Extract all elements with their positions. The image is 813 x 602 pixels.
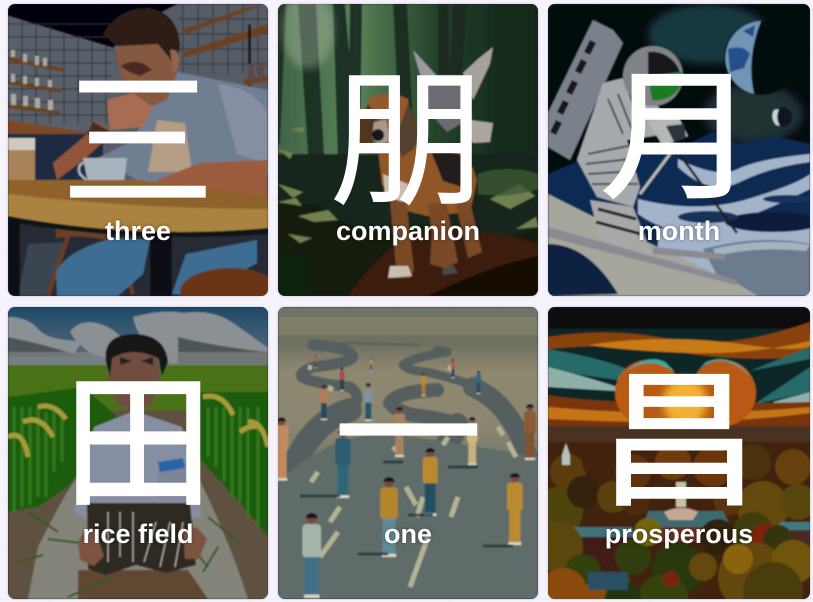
man xyxy=(74,411,202,521)
illustration: man at cafe table xyxy=(8,4,268,296)
ski pole xyxy=(667,137,737,233)
card: rice field xyxy=(8,307,268,599)
english label: companion xyxy=(336,216,480,246)
illustration: astronaut skiing on the moon xyxy=(548,4,810,296)
english label: one xyxy=(384,519,432,549)
tool case xyxy=(87,503,196,575)
helmet xyxy=(623,46,683,106)
english label: prosperous xyxy=(605,519,753,549)
kanji: 昌 xyxy=(598,323,760,536)
card: prosperous xyxy=(548,307,810,599)
illustration: dog and dove in forest xyxy=(278,4,538,296)
card: month xyxy=(548,4,810,296)
kanji: 朋 xyxy=(329,20,487,237)
man hair and face xyxy=(98,69,268,189)
kanji: 月 xyxy=(599,22,758,229)
backpack xyxy=(548,20,623,160)
planet xyxy=(724,21,798,95)
kanji: 一 xyxy=(333,315,483,532)
dove xyxy=(413,50,437,86)
cup xyxy=(83,158,127,183)
english label: three xyxy=(105,216,171,246)
trees xyxy=(548,442,810,599)
card: one xyxy=(278,307,538,599)
people xyxy=(314,355,317,368)
roads xyxy=(287,343,533,482)
twin suns xyxy=(615,360,681,426)
table xyxy=(8,180,268,232)
jeans xyxy=(56,238,257,296)
card: three xyxy=(8,4,268,296)
college buildings xyxy=(648,505,718,542)
english label: month xyxy=(638,216,720,246)
dog xyxy=(378,144,477,216)
illustration: people on branching roads xyxy=(278,307,538,599)
kanji: 三 xyxy=(60,17,216,242)
card: companion xyxy=(278,4,538,296)
kanji: 田 xyxy=(63,327,213,536)
illustration: man standing in flooded rice field xyxy=(8,307,268,599)
english label: rice field xyxy=(82,519,194,549)
astronaut body xyxy=(577,74,673,207)
illustration: twin suns over a college town xyxy=(548,307,810,599)
shadows xyxy=(300,462,513,554)
boot xyxy=(590,200,653,257)
mountains and snow xyxy=(548,132,810,296)
